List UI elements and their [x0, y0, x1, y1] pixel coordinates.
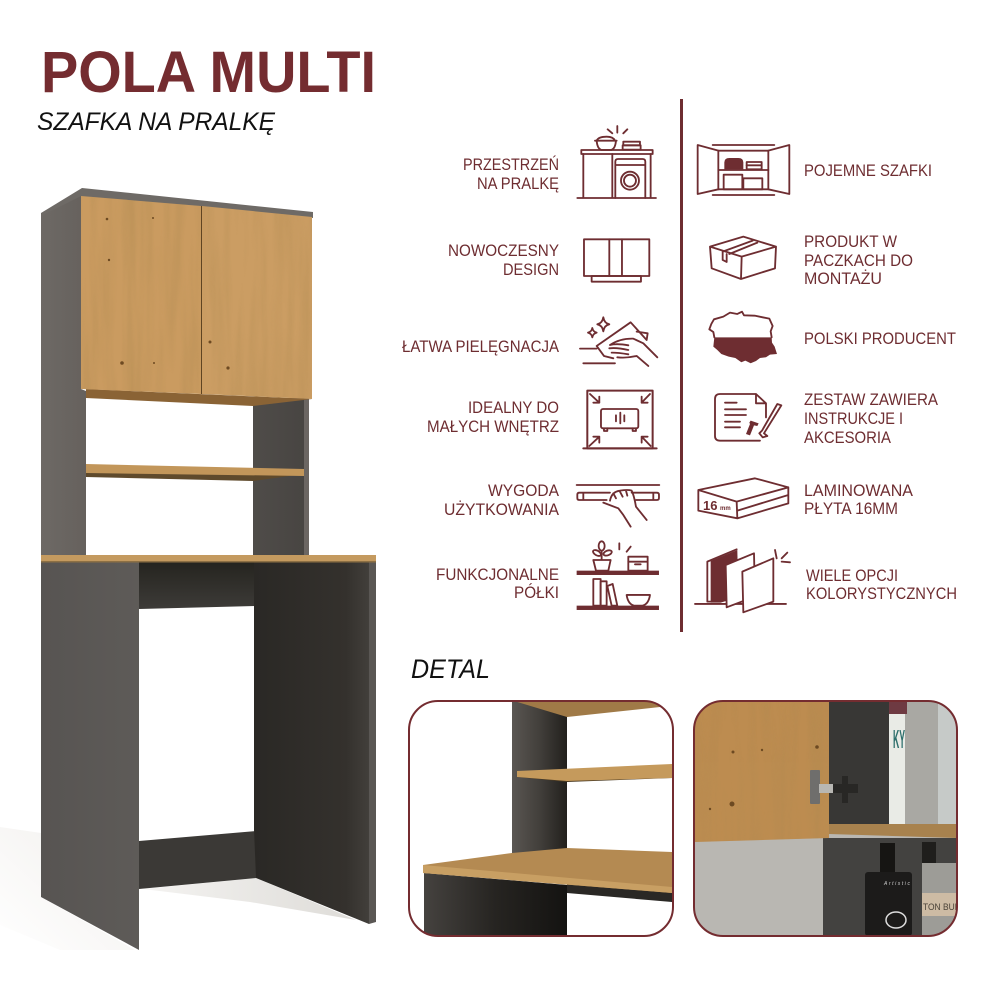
feature: produkt w paczkach: PRODUKT W — [804, 233, 897, 251]
feature: zestaw zawiera: INSTRUKCJE I — [804, 410, 903, 428]
feature: nowoczesny design: DESIGN — [503, 261, 559, 279]
feature: przestrzeń na pralkę — [463, 126, 656, 198]
desk top — [41, 555, 376, 562]
feature: laminowana płyta: mm — [720, 506, 731, 512]
feature: funkcjonalne półki: PÓŁKI — [514, 583, 559, 602]
feature: nowoczesny design: NOWOCZESNY — [448, 242, 559, 260]
detail photo: shelves — [409, 701, 680, 936]
feature: produkt w paczkach: PACZKACH DO — [804, 252, 913, 270]
feature: wiele opcji kolorystycznych: KOLORYSTYCZNYCH — [806, 585, 957, 603]
feature: polski producent — [709, 312, 956, 363]
subtitle: SZAFKA NA PRALKĘ — [37, 108, 275, 136]
feature list: right column — [695, 145, 957, 612]
detail photo: cabinet interior and hinge: Artistic — [883, 881, 910, 887]
feature: laminowana płyta: PŁYTA 16MM — [804, 500, 898, 518]
vertical divider — [680, 99, 683, 632]
feature: laminowana płyta — [698, 478, 913, 518]
desk back rails — [139, 562, 256, 889]
feature: idealny do małych wnętrz: IDEALNY DO — [468, 399, 559, 417]
main product photo: wardrobe over washing machine — [0, 188, 376, 950]
top board — [41, 188, 313, 218]
feature: funkcjonalne półki: FUNKCJONALNE — [436, 566, 559, 584]
right inner panel — [254, 562, 369, 924]
detail photo: cabinet interior and hinge — [694, 701, 957, 936]
feature: produkt w paczkach — [710, 233, 913, 288]
feature: wygoda użytkowania — [444, 482, 659, 527]
feature: łatwa pielęgnacja — [402, 317, 657, 366]
feature: przestrzeń na pralkę: PRZESTRZEŃ — [463, 155, 559, 174]
feature: pojemne szafki — [698, 145, 932, 195]
feature: produkt w paczkach: MONTAŻU — [804, 269, 882, 288]
feature: funkcjonalne półki — [436, 541, 659, 610]
feature: pojemne szafki: POJEMNE SZAFKI — [804, 162, 932, 180]
feature: wiele opcji kolorystycznych: WIELE OPCJI — [806, 567, 898, 585]
open shelf — [86, 464, 304, 481]
feature: nowoczesny design — [448, 239, 649, 282]
upper side panel — [41, 196, 86, 556]
feature: zestaw zawiera: AKCESORIA — [804, 429, 891, 447]
feature: wygoda użytkowania: WYGODA — [488, 482, 559, 500]
detail photo: cabinet interior and hinge: TON BUI — [923, 902, 957, 913]
detail photo: cabinet interior and hinge: KY — [893, 724, 905, 754]
feature: zestaw zawiera: ZESTAW ZAWIERA — [804, 391, 938, 409]
right panel edge — [369, 562, 376, 924]
feature: idealny do małych wnętrz — [427, 391, 657, 448]
feature: przestrzeń na pralkę: NA PRALKĘ — [477, 175, 559, 193]
right upper pillar — [253, 398, 309, 556]
feature: łatwa pielęgnacja: ŁATWA PIELĘGNACJA — [402, 338, 559, 356]
feature: laminowana płyta: LAMINOWANA — [804, 482, 913, 500]
cabinet doors — [81, 196, 312, 399]
feature: zestaw zawiera — [715, 391, 938, 447]
feature list: left column — [402, 126, 659, 610]
feature: idealny do małych wnętrz: MAŁYCH WNĘTRZ — [427, 418, 559, 436]
title: POLA MULTI — [41, 40, 376, 105]
feature: wygoda użytkowania: UŻYTKOWANIA — [444, 500, 559, 519]
feature: polski producent: POLSKI PRODUCENT — [804, 330, 956, 348]
feature: laminowana płyta: 16 — [703, 498, 717, 513]
detail heading: DETAL — [411, 654, 490, 684]
cabinet underside — [86, 389, 312, 406]
left front panel — [41, 562, 139, 950]
floor shadows — [0, 827, 356, 950]
feature: wiele opcji kolorystycznych — [695, 549, 957, 612]
